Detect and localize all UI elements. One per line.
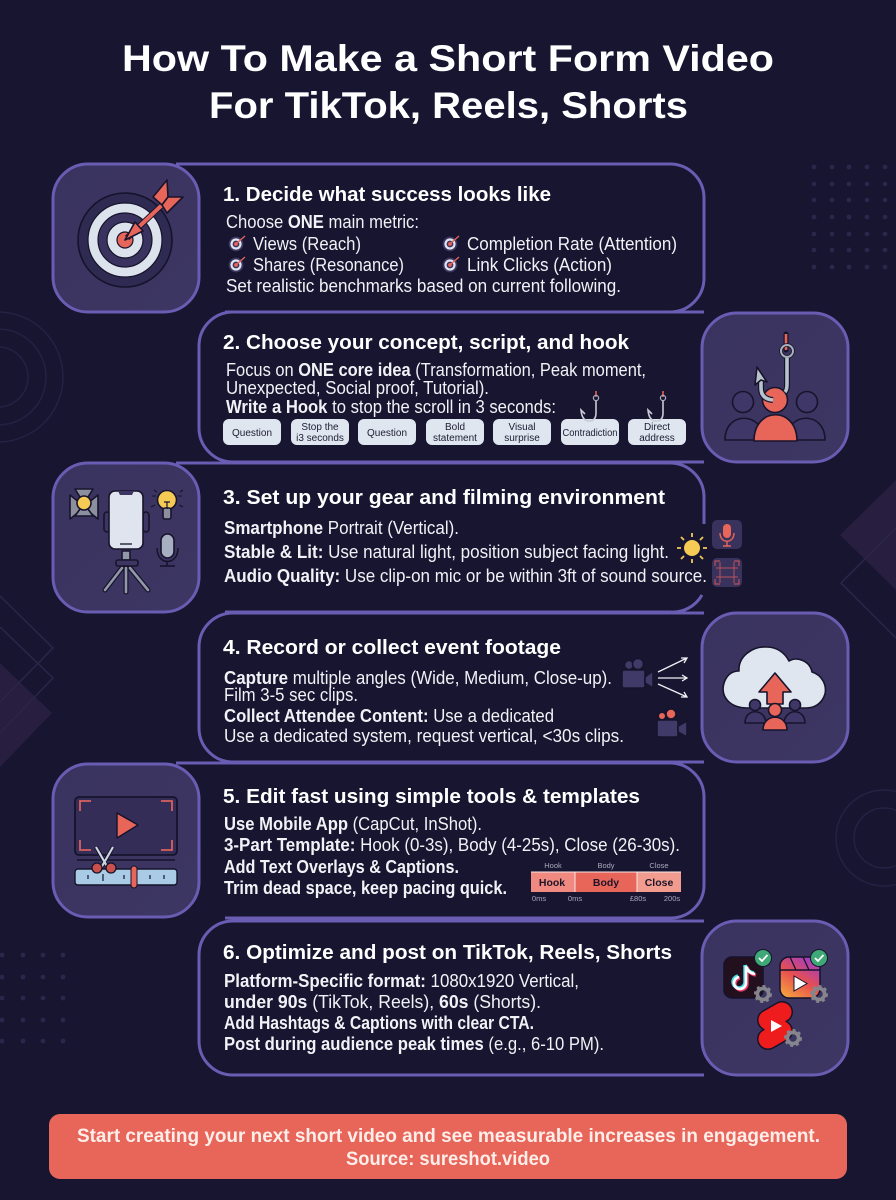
metric list: Views (Reach) bbox=[253, 234, 361, 254]
call to action banner: Start creating your next short video and see measurable increases in engagement. bbox=[77, 1126, 820, 1147]
icon: target with arrow bbox=[78, 180, 183, 287]
heading 6: 6. Optimize and post on TikTok, Reels, Shorts bbox=[223, 941, 672, 964]
metric list: Completion Rate (Attention) bbox=[467, 234, 677, 254]
timeline chart: Close bbox=[645, 877, 673, 889]
body text 3: Audio Quality: Use clip-on mic or be within 3ft of sound source. bbox=[224, 566, 707, 586]
metric list: Shares (Resonance) bbox=[253, 255, 404, 275]
hook type chips: surprise bbox=[504, 433, 540, 444]
panel 2: concept, script and hook bbox=[199, 312, 704, 462]
icon panel: platforms bbox=[702, 921, 848, 1075]
intro text 1: Choose ONE main metric: bbox=[226, 212, 419, 232]
heading 1: 1. Decide what success looks like bbox=[223, 183, 551, 206]
icon panel: hook and audience bbox=[702, 313, 848, 462]
panel 4: record or collect event footage bbox=[199, 613, 704, 762]
timeline chart: Hook bbox=[539, 877, 565, 889]
body text 4: Use a dedicated system, request vertical, <30s clips. bbox=[224, 726, 624, 746]
benchmark text: Set realistic benchmarks based on current following. bbox=[226, 276, 621, 296]
body text 5: 3-Part Template: Hook (0-3s), Body (4-25s), Close (26-30s). bbox=[224, 835, 680, 855]
timeline chart: £80s bbox=[630, 894, 646, 903]
body text 6: under 90s (TikTok, Reels), 60s (Shorts). bbox=[224, 992, 541, 1012]
icon: camera with arrows bbox=[622, 658, 687, 697]
metric list bbox=[228, 234, 677, 275]
call to action banner bbox=[49, 1114, 847, 1179]
body text 2: Write a Hook to stop the scroll in 3 seconds: bbox=[226, 397, 556, 417]
icon: light bulb bbox=[151, 490, 183, 519]
body text 4: Capture multiple angles (Wide, Medium, Close-up). bbox=[224, 668, 612, 688]
heading 5: 5. Edit fast using simple tools & templates bbox=[223, 785, 640, 808]
panel 3: gear and filming environment bbox=[176, 463, 742, 612]
heading 2: 2. Choose your concept, script, and hook bbox=[223, 331, 630, 354]
body text 3 bbox=[224, 518, 707, 586]
body text 4: Collect Attendee Content: Use a dedicated bbox=[224, 706, 554, 726]
body text 2: Focus on ONE core idea (Transformation, Peak moment, bbox=[226, 360, 646, 380]
body text 2: Unexpected, Social proof, Tutorial). bbox=[226, 378, 489, 398]
timeline chart: Body bbox=[597, 861, 615, 870]
icon: red camera bbox=[657, 709, 687, 737]
body text 3: Smartphone Portrait (Vertical). bbox=[224, 518, 459, 538]
icon: microphone bbox=[157, 534, 178, 566]
hook type chips: Question bbox=[367, 428, 407, 439]
panel 1: decide what success looks like bbox=[176, 164, 704, 312]
body text 6: Platform-Specific format: 1080x1920 Vertical, bbox=[224, 971, 579, 991]
icon: small hook 2 bbox=[648, 391, 666, 421]
icon: gears bbox=[755, 986, 827, 1046]
title bbox=[122, 38, 774, 126]
icon: phone on tripod bbox=[104, 491, 149, 592]
hook type chips: Question bbox=[232, 428, 272, 439]
body text 6 bbox=[224, 971, 604, 1054]
icon: small hook 1 bbox=[581, 391, 599, 421]
body text 2 bbox=[226, 360, 646, 417]
body text 4 bbox=[224, 668, 624, 746]
body text 5: Add Text Overlays & Captions. bbox=[224, 857, 459, 877]
heading 4: 4. Record or collect event footage bbox=[223, 636, 561, 659]
title: For TikTok, Reels, Shorts bbox=[209, 85, 688, 126]
icon panel: cloud upload bbox=[702, 613, 848, 762]
heading 3: 3. Set up your gear and filming environment bbox=[223, 486, 665, 509]
decorative background shapes bbox=[0, 165, 896, 1043]
icon: light panel bbox=[70, 489, 98, 519]
timeline chart: 0ms bbox=[532, 894, 546, 903]
hook type chips: Bold bbox=[445, 422, 465, 433]
hook type chips: i3 seconds bbox=[296, 433, 344, 444]
icon: framing grid tile bbox=[712, 558, 742, 587]
hook type chips bbox=[223, 419, 686, 445]
hook type chips: statement bbox=[433, 433, 477, 444]
icon: check badges bbox=[754, 950, 828, 966]
icon panel: phone on tripod bbox=[53, 463, 199, 612]
body text 6: Post during audience peak times (e.g., 6-10 PM). bbox=[224, 1034, 604, 1054]
icon panel: video editing bbox=[53, 764, 199, 917]
timeline chart: 0ms bbox=[568, 894, 582, 903]
title: How To Make a Short Form Video bbox=[122, 38, 774, 79]
hook type chips: Direct bbox=[644, 422, 670, 433]
timeline chart: Hook bbox=[544, 861, 562, 870]
icon panel: target bbox=[53, 164, 199, 312]
body text 6: Add Hashtags & Captions with clear CTA. bbox=[224, 1013, 534, 1033]
body text 5: Use Mobile App (CapCut, InShot). bbox=[224, 814, 482, 834]
hook type chips: address bbox=[639, 433, 675, 444]
body text 5: Trim dead space, keep pacing quick. bbox=[224, 878, 507, 898]
timeline chart: 200s bbox=[664, 894, 680, 903]
hook type chips: Visual bbox=[508, 422, 536, 433]
timeline chart: Close bbox=[649, 861, 669, 870]
panel 6: optimize and post bbox=[199, 921, 704, 1075]
icon: Reels bbox=[780, 957, 820, 998]
body text 5 bbox=[224, 814, 680, 898]
icon: Shorts bbox=[768, 1012, 782, 1039]
hook type chips: Contradiction bbox=[562, 428, 618, 439]
icon: TikTok bbox=[724, 957, 763, 998]
icon: microphone tile bbox=[712, 520, 742, 549]
body text 3: Stable & Lit: Use natural light, position subject facing light. bbox=[224, 542, 669, 562]
timeline chart: Body bbox=[593, 877, 619, 889]
icon: sun bbox=[677, 533, 707, 563]
call to action banner: Source: sureshot.video bbox=[346, 1149, 550, 1170]
body text 4: Film 3-5 sec clips. bbox=[224, 685, 358, 705]
metric list: Link Clicks (Action) bbox=[467, 255, 612, 275]
icon: fish hook over people bbox=[725, 334, 825, 441]
panel 5: edit fast bbox=[176, 763, 704, 918]
timeline chart bbox=[531, 861, 681, 903]
hook type chips: Stop the bbox=[301, 422, 339, 433]
icon: video frame with scissors and timeline bbox=[75, 797, 177, 888]
icon: cloud with upload arrow and people bbox=[723, 647, 825, 730]
